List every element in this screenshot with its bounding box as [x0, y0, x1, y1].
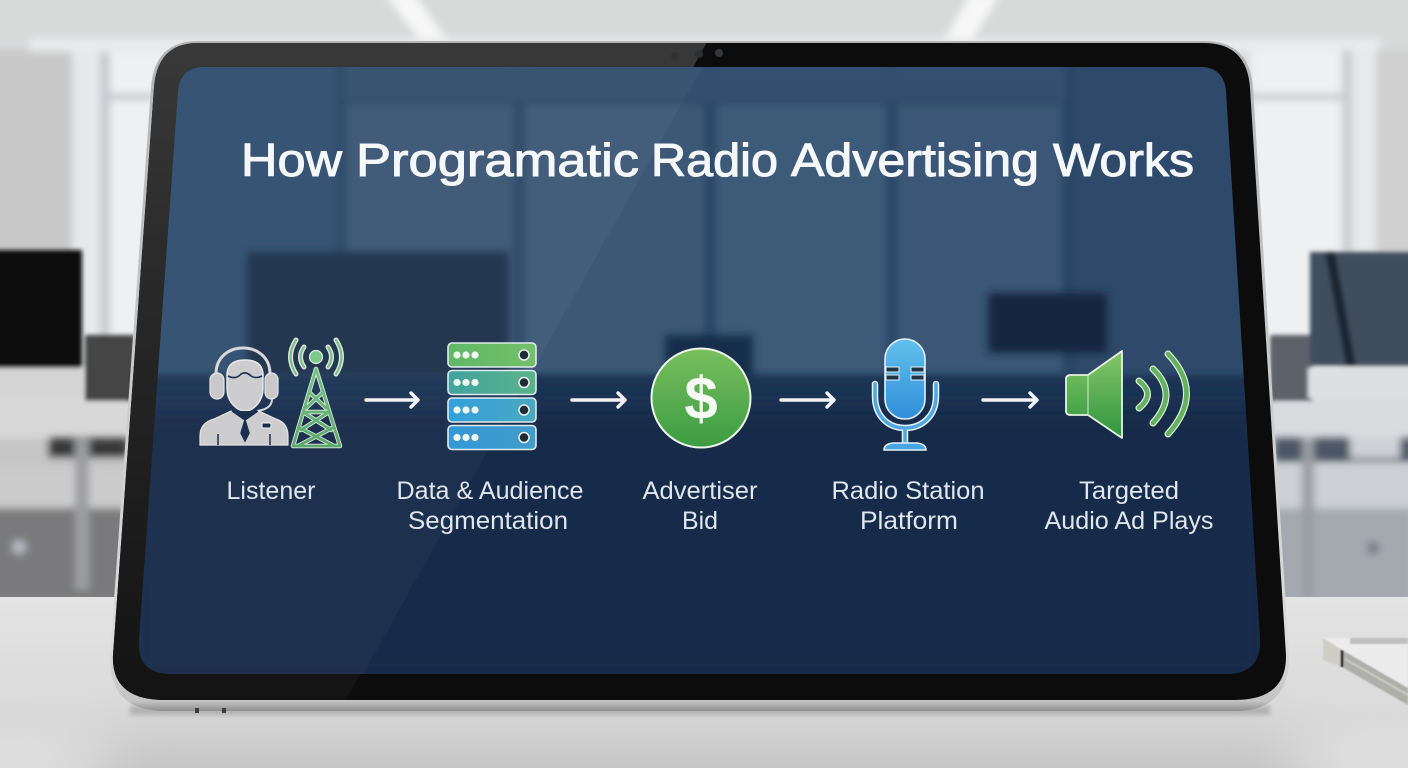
tablet silver rim: [110, 41, 1289, 711]
screen base gradient: [130, 60, 1270, 680]
label: listener: Listener: [226, 477, 316, 505]
icon: speaker with sound waves: [1066, 351, 1186, 438]
notebook on desk: [1323, 638, 1408, 705]
blurred room seen through screen: [130, 60, 1265, 373]
label: targeted audio ad plays: Targeted: [1079, 477, 1179, 505]
icon: radio tower: [290, 340, 342, 446]
step 1: listener: [200, 340, 342, 505]
label: radio station platform: [832, 477, 984, 535]
label: data and audience segmentation: Data & Audience: [396, 477, 584, 505]
step 5: targeted audio ad plays: [1044, 351, 1214, 535]
tablet: [100, 40, 1289, 711]
arrow 1: [366, 393, 418, 407]
label: data and audience segmentation: Segmentation: [408, 507, 568, 535]
icon: listener with headset: [200, 348, 288, 445]
step 3: advertiser bid: [642, 348, 758, 535]
blurred office background: [0, 0, 1408, 603]
tablet black bezel: [113, 43, 1286, 700]
title: Advertising: [791, 134, 1039, 186]
label: radio station platform: Platform: [860, 507, 958, 535]
step 4: radio station platform: [832, 339, 984, 535]
arrow 3: [781, 393, 834, 407]
desk surface: [0, 597, 1408, 768]
step 2: data and audience segmentation: [396, 343, 584, 535]
camera dots: [671, 49, 723, 60]
glass reflection: [130, 60, 706, 680]
tablet side buttons: [195, 708, 226, 713]
label: targeted audio ad plays: Audio Ad Plays: [1044, 507, 1214, 535]
icon: dollar coin: $: [684, 365, 718, 432]
bezel reflection: [100, 40, 708, 702]
title: Works: [1053, 134, 1194, 186]
title: How: [241, 134, 343, 186]
icon: server stack: [448, 343, 536, 450]
label: advertiser bid: [642, 477, 758, 535]
label: radio station platform: Radio Station: [832, 477, 984, 505]
title: [241, 134, 1194, 186]
tablet shadow on desk: [130, 706, 1270, 715]
arrow 4: [983, 393, 1037, 407]
label: targeted audio ad plays: [1044, 477, 1214, 535]
label: advertiser bid: Bid: [682, 507, 718, 535]
title: Programatic: [356, 134, 639, 186]
arrow 2: [572, 393, 625, 407]
screen: [130, 60, 1270, 685]
label: data and audience segmentation: [396, 477, 584, 535]
label: advertiser bid: Advertiser: [642, 477, 758, 505]
desk highlight at the left and right: [0, 715, 1408, 768]
icon: dollar coin: [652, 348, 750, 448]
icon: microphone: [875, 339, 936, 450]
title: Radio: [651, 134, 778, 186]
